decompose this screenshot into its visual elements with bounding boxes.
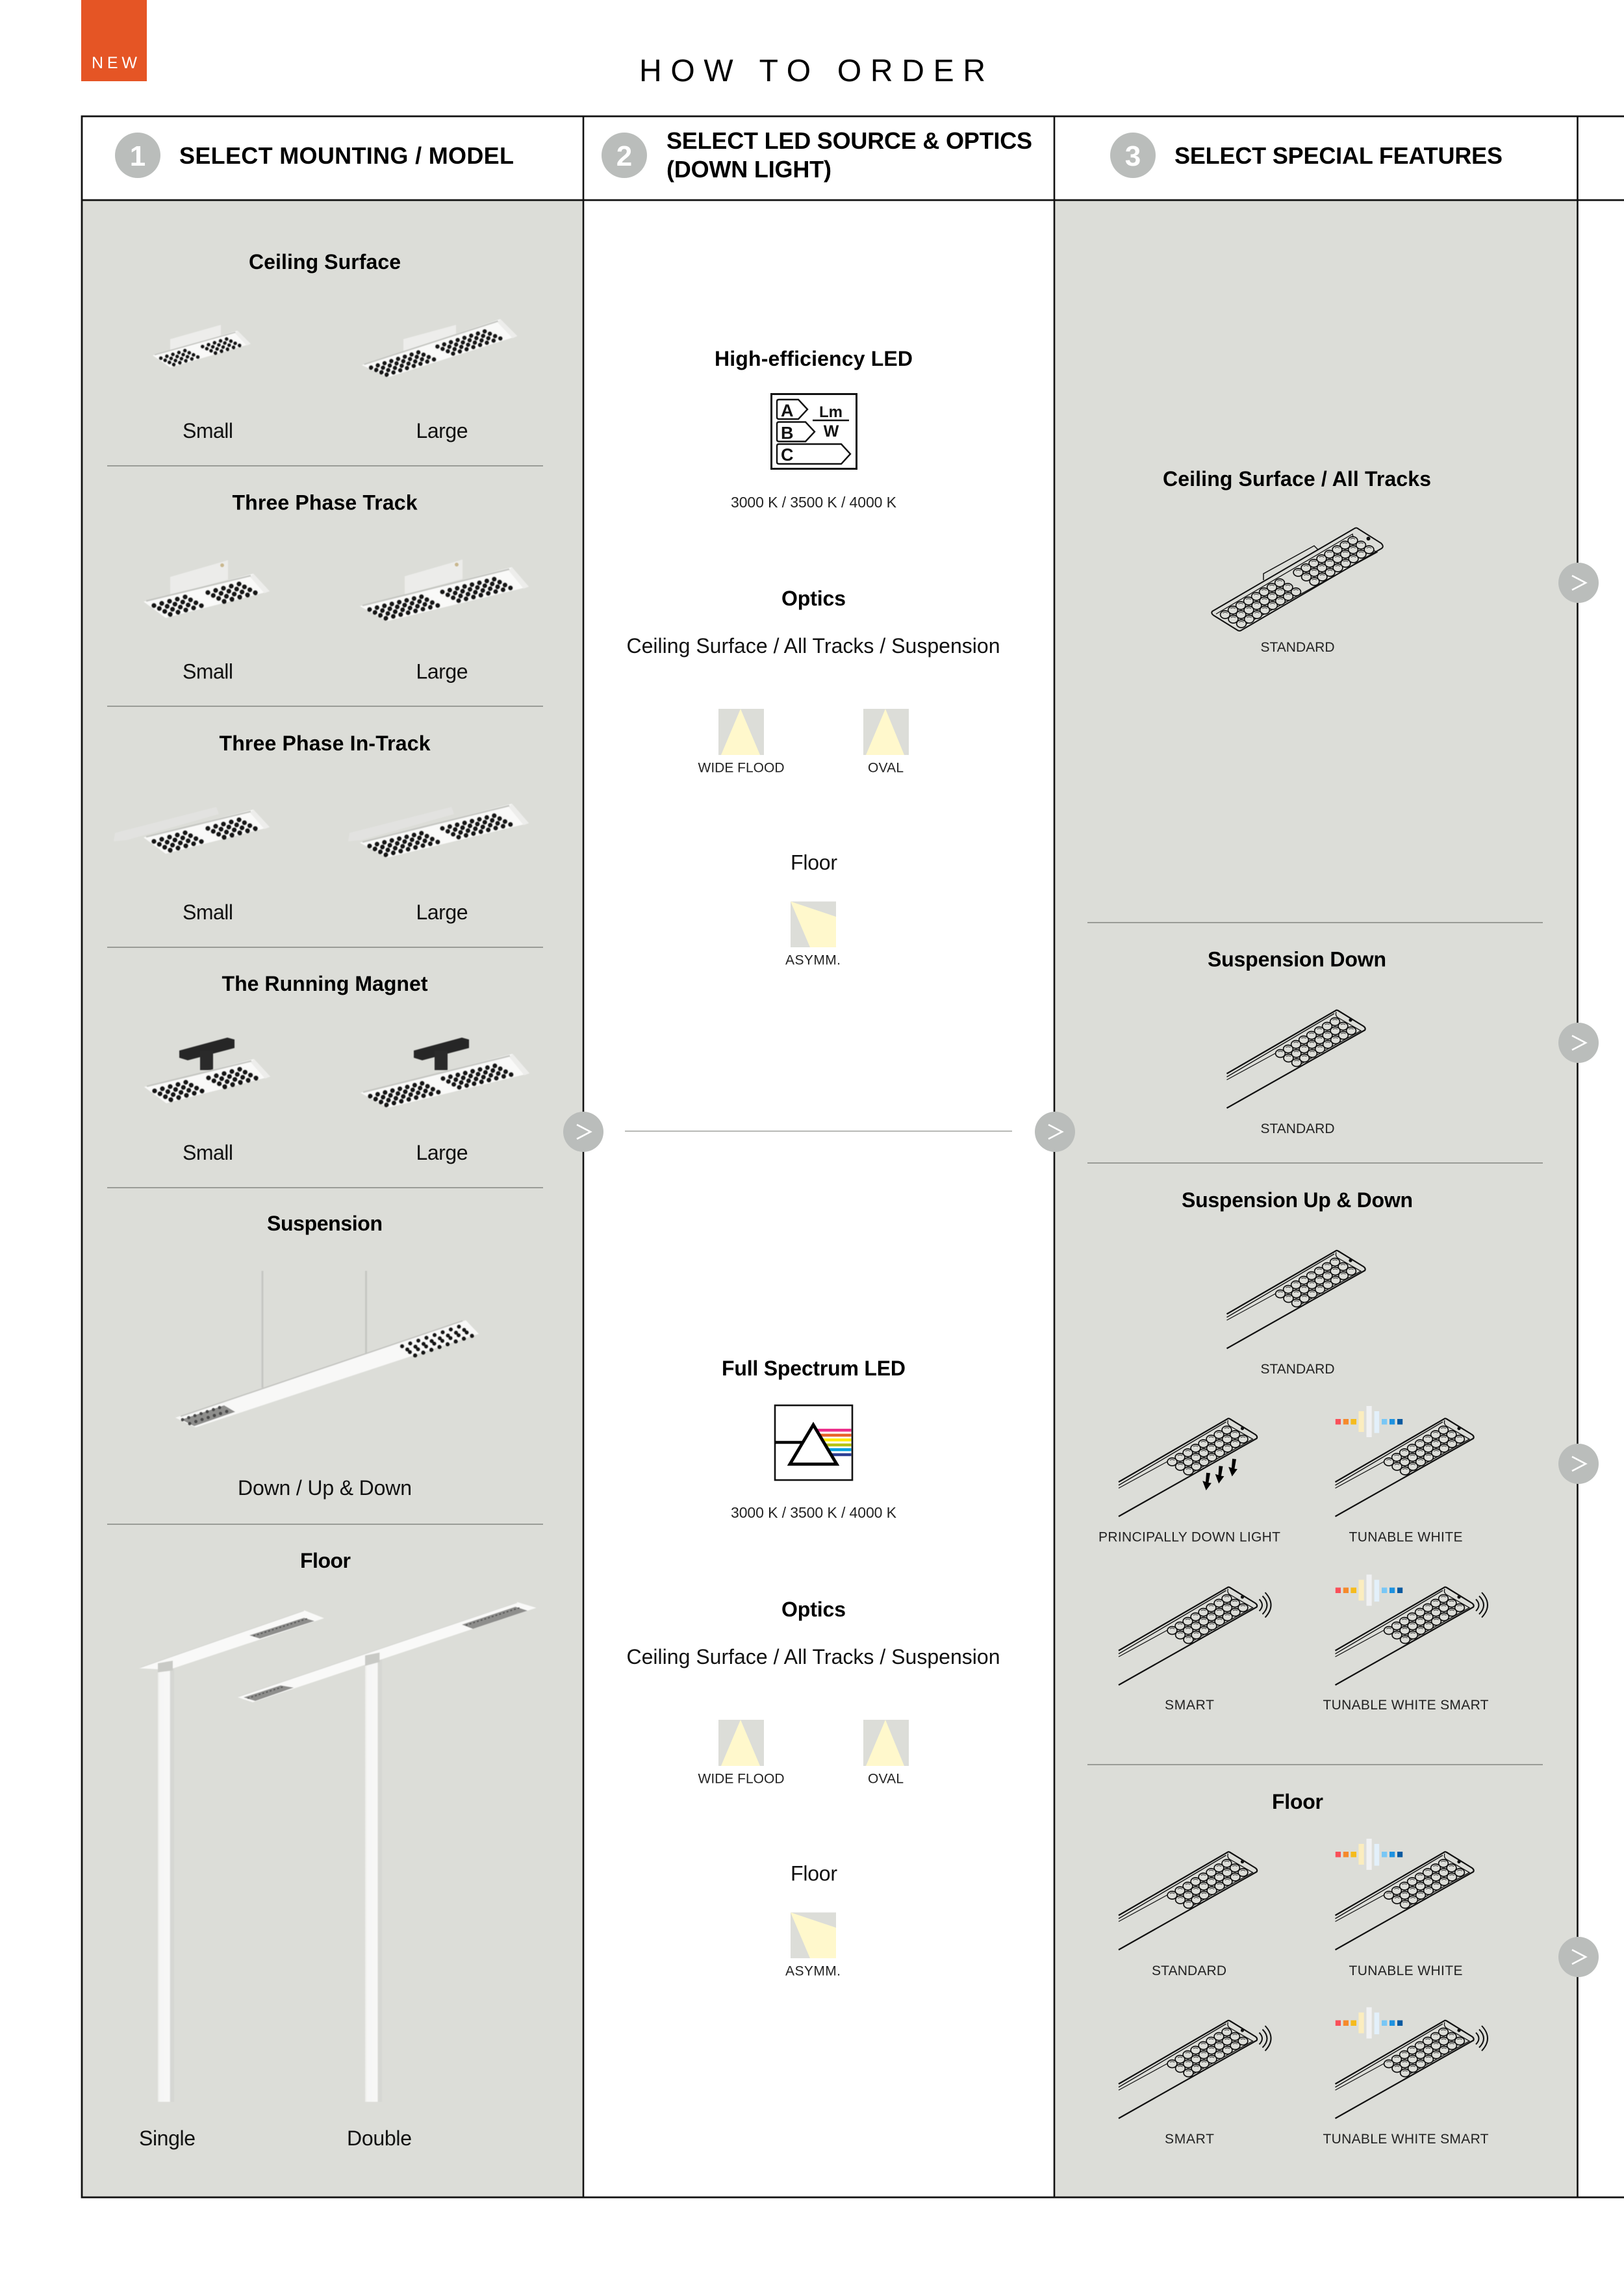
badge: new [81,0,147,81]
step 1 header: SELECT MOUNTING / MODEL [179,142,514,169]
section: floor features: TUNABLE WHITE SMART [1323,2132,1489,2147]
section: three phase in-track: Large [416,901,468,924]
icon: floor smart [1119,2021,1271,2118]
step 3 header: SELECT SPECIAL FEATURES [1174,142,1503,169]
section: ceiling surface and all tracks: STANDARD [1260,640,1334,655]
block: optics for high-efficiency LED: Floor [791,851,837,875]
icon: energy efficiency label: Lm [819,403,843,421]
arrow: column 2 to column 3 [1035,1112,1075,1152]
section: three phase track [144,491,529,683]
section: ceiling surface [152,250,520,442]
panel: column 3 background [1054,200,1577,2197]
section: suspension up and down: TUNABLE WHITE SMART [1323,1698,1489,1713]
block: optics for full spectrum LED [626,1598,1000,1979]
section: ceiling surface: Small [183,419,233,442]
icon: floor tunable white [1336,1839,1474,1950]
icon: asymmetric beam [785,1913,841,1979]
arrow: ceiling features onward [1558,563,1599,603]
section: floor: Single [139,2127,196,2150]
section: floor features: TUNABLE WHITE [1349,1963,1463,1978]
block: full spectrum LED: 3000 K / 3500 K / 4000 K [731,1504,897,1521]
section: the running magnet [144,972,529,1164]
icon: prism spectrum [775,1405,852,1480]
icon: suspension up and down standard [1226,1251,1365,1349]
section: three phase in-track [114,732,529,924]
section: the running magnet: The Running Magnet [222,972,428,995]
icon: wide flood beam: WIDE FLOOD [698,760,785,776]
panel: column 1 mounting models [107,250,543,2150]
block: optics for full spectrum LED: Ceiling Surface / All Tracks / Suspension [626,1645,1000,1668]
section: three phase in-track: Small [183,901,233,924]
icon: energy efficiency label: C [781,445,794,465]
step 3 header: 3 [1125,140,1141,172]
icon: asymmetric beam [785,902,841,968]
icon: suspension standard [1226,1010,1365,1108]
icon: asymmetric beam: ASYMM. [785,953,841,968]
icon: wide flood beam [698,1720,785,1787]
section: the running magnet: Large [416,1141,468,1164]
icon: energy efficiency label: W [824,422,839,441]
step 2 header: 2 [616,140,632,172]
section: floor [139,1549,537,2150]
icon: energy efficiency label: B [781,424,794,443]
block: optics for full spectrum LED: Optics [781,1598,846,1621]
step 3 header [1110,133,1503,178]
title: HOW TO ORDER [639,54,985,88]
icon: tunable white [1336,1406,1474,1516]
section: three phase in-track: Three Phase In-Track [220,732,431,755]
section: suspension up and down: SMART [1165,1698,1214,1713]
section: ceiling surface and all tracks: Ceiling Surface / All Tracks [1163,467,1431,491]
section: three phase track: Large [416,660,468,683]
icon: energy efficiency label [772,394,856,469]
section: suspension up and down: PRINCIPALLY DOWN LIGHT [1098,1529,1280,1545]
section: floor features [1119,1790,1489,2147]
icon: oval beam [863,709,909,776]
step 2 header: SELECT LED SOURCE & OPTICS [666,127,1032,154]
icon: oval beam: OVAL [868,760,904,776]
section: floor features: SMART [1165,2132,1214,2147]
icon: ceiling luminaire line drawing [1212,528,1383,631]
section: suspension up and down: STANDARD [1260,1362,1334,1377]
icon: wide flood beam: WIDE FLOOD [698,1771,785,1787]
arrow: column 1 to column 2 [563,1112,603,1152]
icon: energy efficiency label: A [781,401,794,420]
block: optics for high-efficiency LED: Optics [781,587,846,610]
icon: floor tunable white smart [1336,2008,1488,2118]
step 2 header [602,127,1032,183]
section: floor features: STANDARD [1152,1963,1226,1978]
section: suspension [175,1212,479,1500]
block: full spectrum LED: Full Spectrum LED [722,1357,906,1380]
block: full spectrum LED [722,1357,906,1521]
step 1 header [115,133,514,178]
section: suspension down: STANDARD [1260,1121,1334,1136]
panel: column 2 LED source and optics [625,347,1012,1979]
icon: asymmetric beam: ASYMM. [785,1964,841,1979]
arrow: suspension down onward [1558,1023,1599,1063]
block: optics for high-efficiency LED: Ceiling Surface / All Tracks / Suspension [626,634,1000,658]
arrow: suspension up and down onward [1558,1444,1599,1484]
section: three phase track: Small [183,660,233,683]
section: ceiling surface: Large [416,419,468,442]
section: ceiling surface: Ceiling Surface [249,250,401,274]
section: the running magnet: Small [183,1141,233,1164]
block: optics for high-efficiency LED [626,587,1000,968]
block: high-efficiency LED [715,347,913,511]
icon: oval beam: OVAL [868,1771,904,1787]
section: floor: Double [347,2127,412,2150]
section: ceiling surface and all tracks [1163,467,1431,655]
section: suspension up and down: TUNABLE WHITE [1349,1529,1463,1545]
badge: new: NEW [92,54,137,72]
step 1 header: 1 [130,140,146,172]
icon: principally down light [1119,1418,1257,1516]
section: suspension down [1208,947,1386,1136]
section: suspension up and down: Suspension Up & Down [1182,1188,1413,1212]
panel: column 1 background [81,200,583,2197]
section: suspension up and down [1098,1188,1489,1713]
step 2 header: (DOWN LIGHT) [666,156,831,183]
icon: smart [1119,1587,1271,1685]
block: optics for full spectrum LED: Floor [791,1862,837,1885]
section: suspension down: Suspension Down [1208,947,1386,971]
icon: wide flood beam [698,709,785,776]
arrow: floor onward [1558,1937,1599,1977]
section: suspension: Down / Up & Down [238,1476,412,1500]
section: floor features: Floor [1272,1790,1323,1813]
icon: floor standard [1119,1852,1257,1950]
section: three phase track: Three Phase Track [233,491,418,515]
panel: column 3 special features [1087,467,1543,2147]
floor lamp: single [140,1610,324,2102]
icon: tunable white smart [1336,1575,1488,1685]
block: high-efficiency LED: High-efficiency LED [715,347,913,370]
section: floor: Floor [300,1549,351,1572]
floor lamp: double [238,1602,537,2102]
block: high-efficiency LED: 3000 K / 3500 K / 4000 K [731,494,897,511]
icon: oval beam [863,1720,909,1787]
section: suspension: Suspension [267,1212,383,1235]
